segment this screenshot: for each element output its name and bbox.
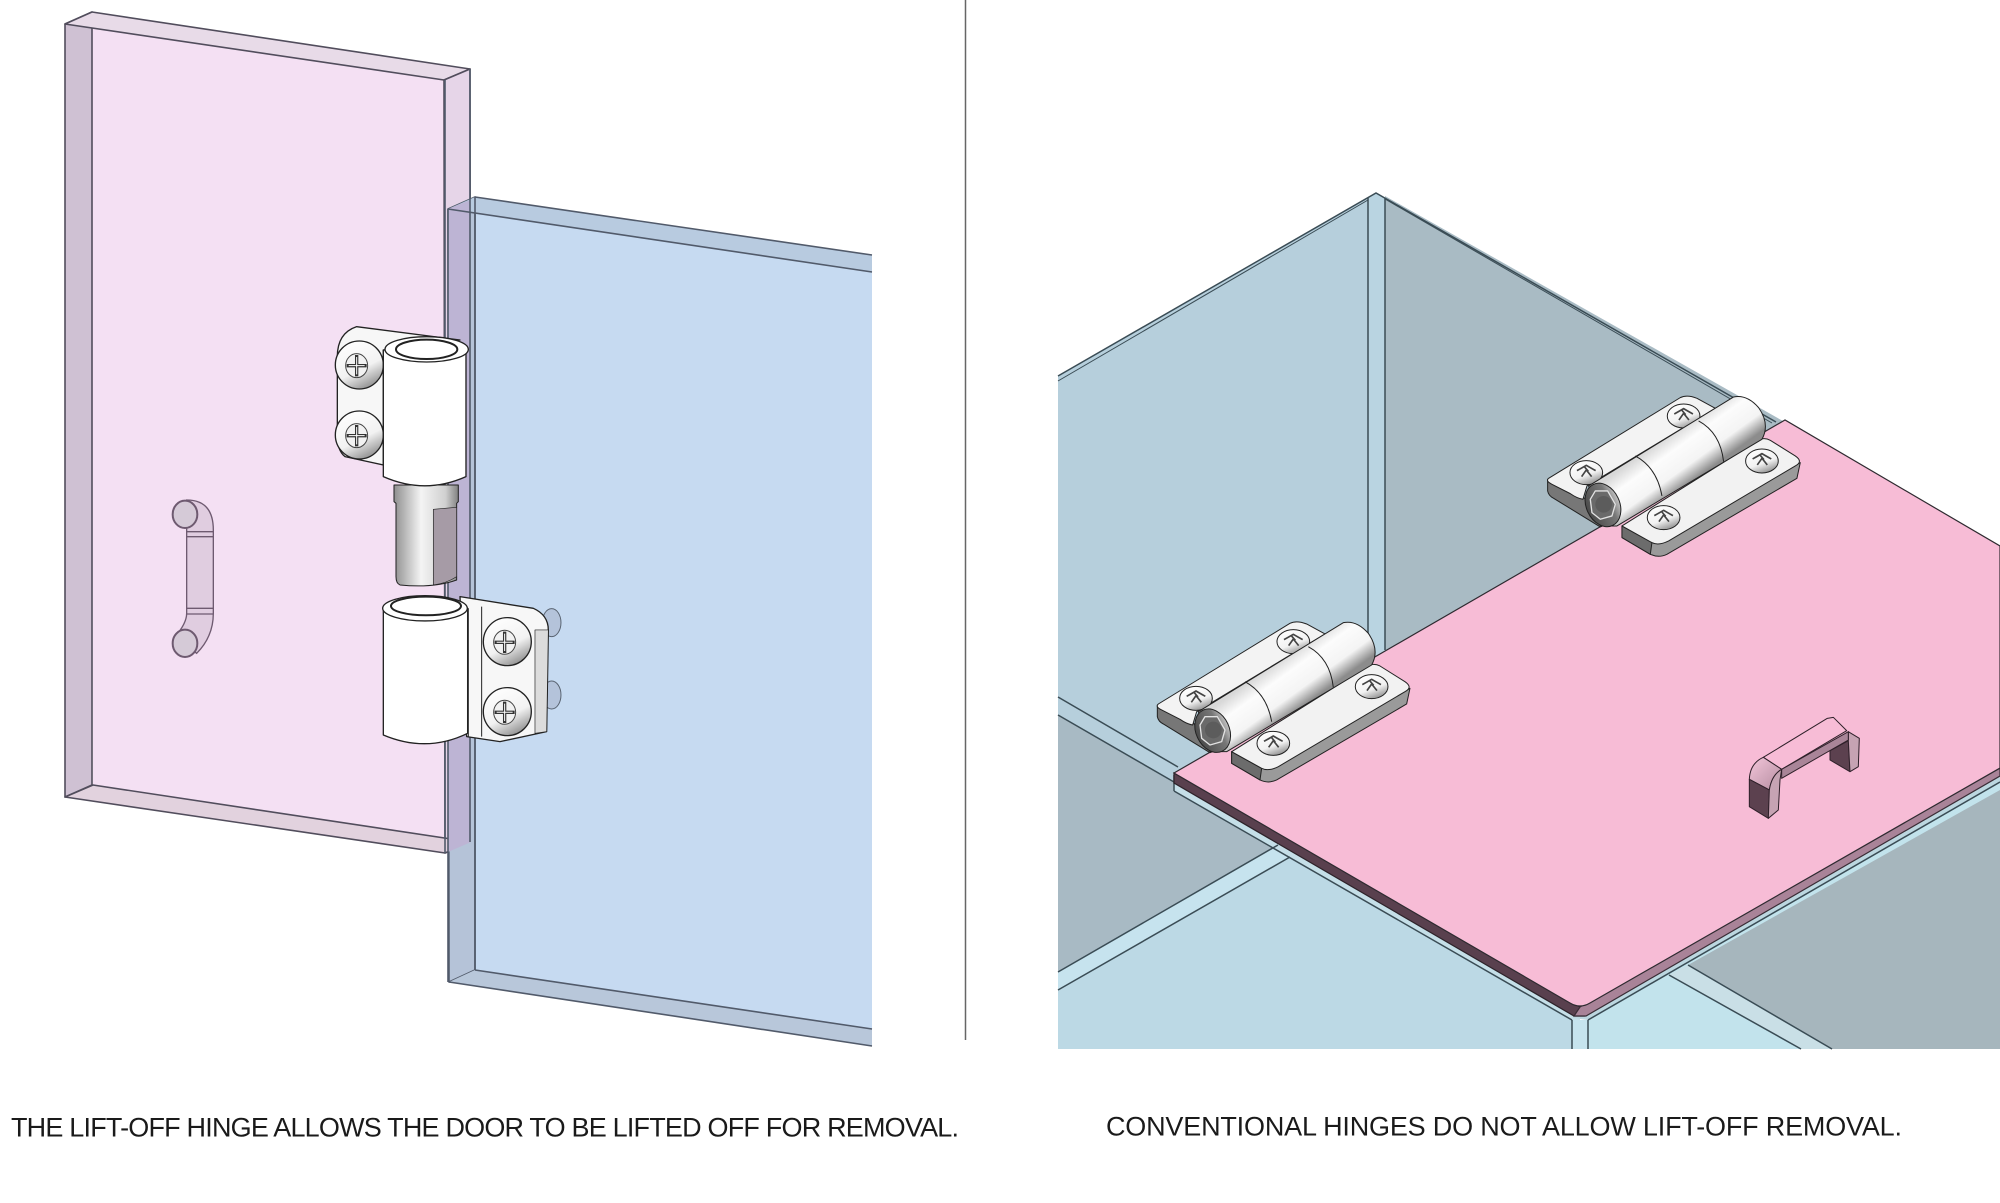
strip under panel, right edge xyxy=(1572,770,2000,1020)
pink door xyxy=(65,12,471,853)
strip under panel, left edge xyxy=(1174,775,1580,1022)
blue door xyxy=(445,69,872,1046)
panel: conventional hinge illustration xyxy=(1058,193,2000,1049)
caption: lift-off hinge: THE LIFT-OFF HINGE ALLOWS THE DOOR TO BE LIFTED OFF FOR REMOVAL. xyxy=(11,1112,959,1142)
lift-off hinge, separated xyxy=(335,327,561,744)
right lower wall xyxy=(1688,790,2000,1049)
left wall xyxy=(1058,193,1376,780)
conventional hinge, rear xyxy=(1548,396,1800,556)
upper hinge leaf on door xyxy=(335,327,460,465)
conventional hinge, front xyxy=(1157,622,1410,782)
back wall xyxy=(1385,196,1790,700)
edge lines of the enclosure xyxy=(1058,193,2000,1049)
door handle xyxy=(173,500,213,657)
divider between panels xyxy=(964,0,966,1040)
lower hinge leaf xyxy=(460,597,548,742)
corner pillar xyxy=(1368,193,1385,680)
lower hinge bolts xyxy=(542,609,561,709)
panel: lift-off hinge illustration xyxy=(65,12,872,1046)
upper barrel xyxy=(383,337,468,486)
lower barrel xyxy=(383,596,468,744)
door pull handle xyxy=(1749,717,1859,818)
right floor xyxy=(1588,782,2000,1049)
lift-off pin xyxy=(394,485,458,586)
lower left wall xyxy=(1058,697,1500,1049)
left floor xyxy=(1058,845,1572,1049)
pink door panel xyxy=(1174,420,2000,1016)
caption: conventional hinges: CONVENTIONAL HINGES DO NOT ALLOW LIFT-OFF REMOVAL. xyxy=(1106,1112,1902,1142)
